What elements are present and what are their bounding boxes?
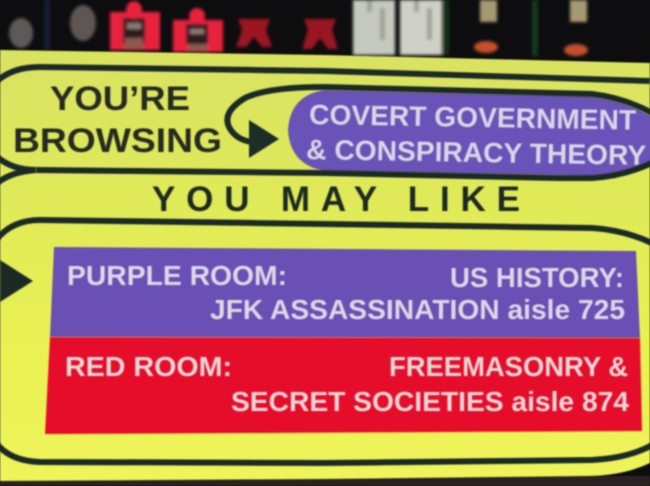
panel: purple room: JFK ASSASSINATION aisle 725 bbox=[210, 294, 625, 325]
heading: you're browsing bbox=[13, 80, 222, 160]
purple pill: current section: COVERT GOVERNMENT bbox=[309, 99, 636, 136]
panel: purple room bbox=[50, 247, 640, 338]
bookshelf with book spines bbox=[9, 0, 588, 56]
panel: red room: SECRET SOCIETIES aisle 874 bbox=[231, 386, 629, 417]
panel: purple room: PURPLE ROOM: bbox=[67, 260, 287, 291]
bottom shelf edge bbox=[0, 476, 650, 486]
icon: arrow to current section bbox=[249, 120, 279, 158]
purple pill: current section: & CONSPIRACY THEORY bbox=[306, 134, 647, 171]
panel: red room bbox=[45, 337, 642, 434]
purple pill: current section bbox=[288, 90, 650, 176]
heading: you may like: YOU MAY LIKE bbox=[152, 180, 520, 219]
panel: red room: RED ROOM: bbox=[65, 351, 232, 382]
heading: you're browsing: YOU’RE bbox=[50, 80, 190, 118]
panel: red room: FREEMASONRY & bbox=[389, 351, 628, 382]
heading: you're browsing: BROWSING bbox=[13, 122, 222, 160]
panel: purple room: US HISTORY: bbox=[450, 262, 624, 293]
pill outline bbox=[36, 87, 650, 178]
icon: arrow to rooms bbox=[0, 260, 33, 302]
